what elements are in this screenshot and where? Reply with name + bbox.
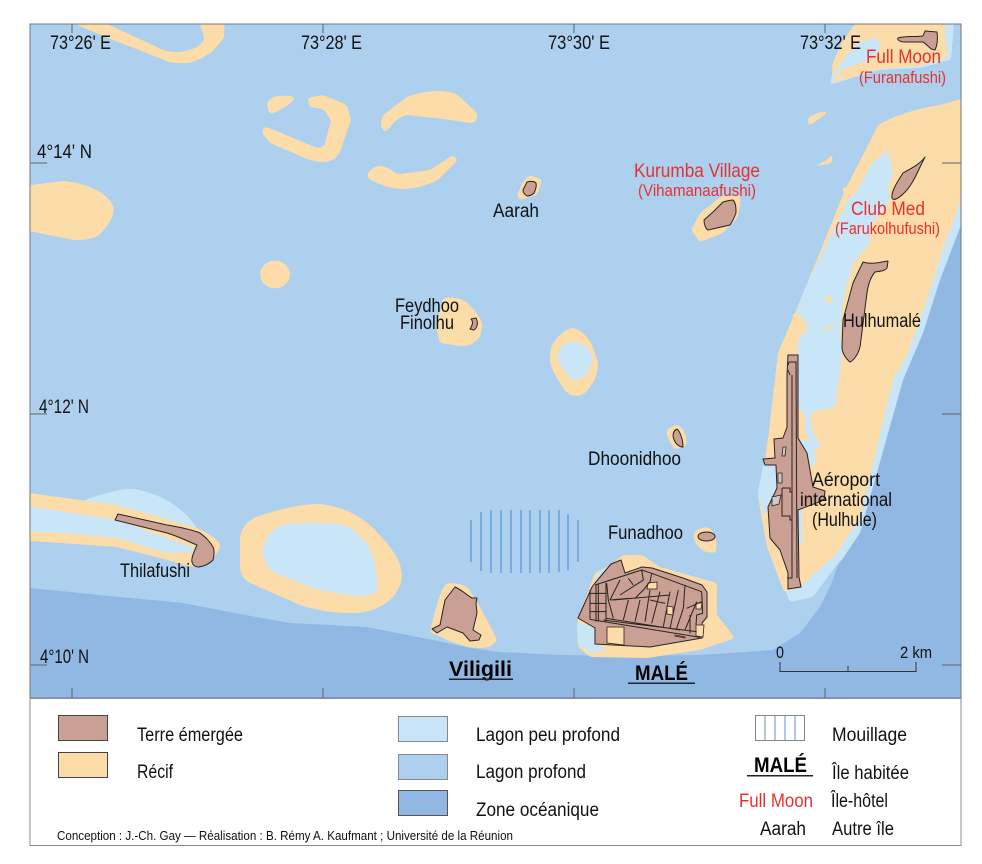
other island labels: Feydhoo — [395, 296, 459, 317]
legend: Île-hôtel — [739, 790, 888, 812]
legend: Autre île: Aarah — [760, 819, 806, 840]
legend panel — [30, 698, 961, 846]
graticule ticks — [30, 24, 961, 698]
other island labels: Dhoonidhoo — [588, 449, 681, 470]
deep lagoon background — [30, 24, 961, 698]
legend: Île-hôtel: Full Moon — [739, 791, 813, 812]
island: Dhoonidhoo — [667, 424, 687, 450]
hotel island labels: (Farukolhufushi) — [835, 219, 940, 238]
reef bars crossing the shallow lagoon — [792, 187, 858, 440]
island: Malé — [577, 555, 735, 658]
island: Viligili — [430, 583, 497, 648]
latitude labels — [37, 142, 92, 668]
legend: Lagon peu profond: Lagon peu profond — [476, 725, 620, 746]
shallow band along eastern reef — [786, 202, 960, 602]
shallow lagoon west of airport — [758, 465, 777, 518]
small reefs north-east — [808, 110, 833, 167]
island: central reef ring — [550, 328, 598, 396]
scale bar: 2 km — [900, 643, 932, 662]
inhabited island label: Viligili: Viligili — [449, 658, 512, 681]
latitude labels: 4°14' N — [37, 142, 92, 163]
longitude labels: 73°30' E — [548, 33, 610, 54]
shallow lagoon east of runway — [798, 509, 802, 545]
land: Club Med island — [892, 157, 925, 199]
mooring area — [471, 510, 578, 573]
map frame — [30, 24, 961, 698]
other island labels: Hulhumalé — [843, 311, 921, 332]
island: Thilafushi — [15, 489, 220, 567]
legend: Autre île: Autre île — [832, 819, 894, 840]
legend: Île-hôtel: Île-hôtel — [830, 790, 888, 812]
latitude labels: 4°12' N — [39, 397, 89, 418]
scale bar — [776, 643, 932, 672]
airport island — [763, 355, 825, 589]
legend: Île habitée: MALÉ — [754, 754, 807, 777]
legend: Lagon profond: Lagon profond — [476, 762, 586, 783]
longitude labels: 73°26' E — [50, 33, 111, 54]
longitude labels: 73°28' E — [301, 33, 362, 54]
legend: Terre émergée — [58, 716, 243, 746]
land: Full Moon island — [898, 31, 937, 50]
legend: Zone océanique: Zone océanique — [476, 800, 599, 821]
reef: eastern barrier — [758, 99, 960, 592]
legend: Lagon peu profond — [398, 716, 620, 746]
hotel island labels: Full Moon — [866, 47, 941, 68]
hotel island labels: (Furanafushi) — [859, 68, 946, 87]
other island labels: Aarah — [493, 201, 539, 222]
legend: Zone océanique — [398, 790, 599, 821]
hotel island labels: (Vihamanaafushi) — [638, 181, 756, 200]
credits: Conception : J.-Ch. Gay — Réalisation : B. Rémy A. Kaufmant ; Université de la Réunion — [57, 828, 513, 843]
other island labels: international — [800, 490, 892, 511]
island: Funadhoo — [694, 527, 717, 553]
hotel island labels: Kurumba Village — [634, 161, 760, 182]
hotel island labels — [634, 47, 946, 238]
longitude labels: 73°32' E — [800, 33, 861, 54]
latitude labels: 4°10' N — [40, 647, 89, 668]
island: Kurumba Village — [691, 195, 741, 242]
other island labels: Funadhoo — [608, 523, 683, 544]
legend: Mouillage — [756, 716, 907, 746]
central atoll — [240, 504, 402, 613]
legend: Récif: Récif — [137, 762, 174, 783]
reef and lagoon: Full Moon atoll — [830, 24, 954, 84]
ocean zone — [30, 226, 960, 698]
inhabited island label: Malé: MALÉ — [635, 662, 688, 685]
legend: Terre émergée: Terre émergée — [137, 725, 243, 746]
other island labels: (Hulhule) — [812, 510, 877, 531]
legend: Autre île — [760, 819, 894, 840]
other island labels: Thilafushi — [120, 561, 190, 582]
longitude labels — [50, 33, 861, 54]
legend: Île habitée — [747, 754, 909, 784]
shallow lagoon: eastern inner — [796, 150, 893, 467]
island: Aarah — [517, 175, 542, 200]
Malé street network — [590, 570, 703, 637]
legend: Mouillage: Mouillage — [832, 725, 907, 746]
legend frame — [30, 698, 961, 846]
other island labels: Finolhu — [400, 313, 454, 334]
other island labels — [120, 201, 921, 582]
reefs: north-west — [15, 12, 477, 288]
land: Hulhumale island — [842, 261, 888, 362]
other island labels: Aéroport — [812, 470, 881, 491]
legend: Lagon profond — [398, 754, 586, 783]
hotel island labels: Club Med — [851, 199, 925, 220]
legend: Récif — [58, 752, 174, 783]
scale bar: 0 — [776, 643, 784, 662]
island: Feydhoo Finolhu — [436, 298, 482, 346]
legend: Île habitée: Île habitée — [831, 762, 909, 784]
